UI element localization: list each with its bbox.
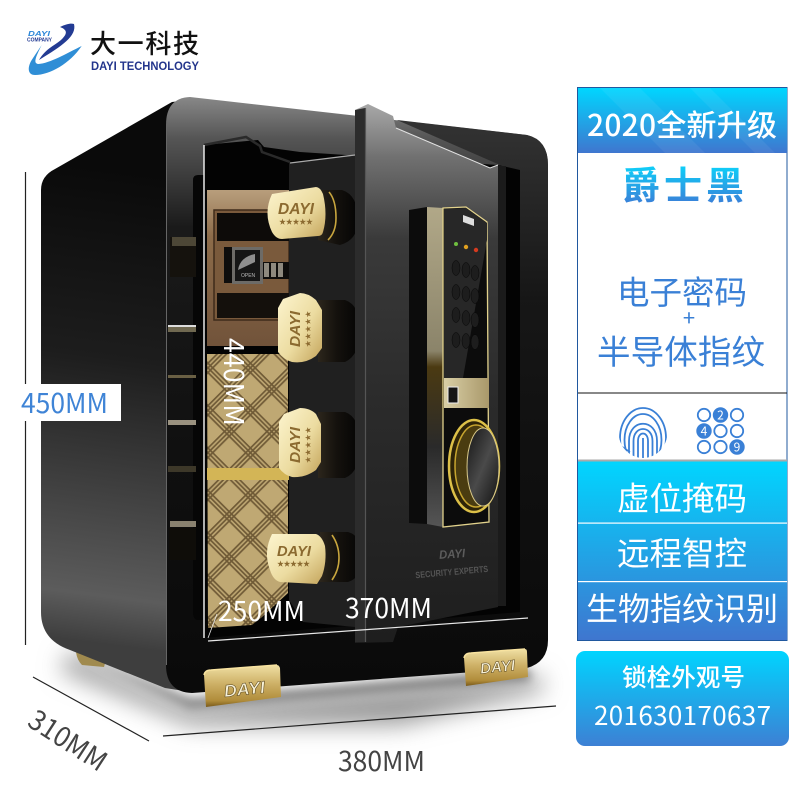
front foot left	[204, 665, 281, 707]
interior lower slot	[217, 293, 289, 318]
patent number: 201630170637	[594, 696, 771, 733]
front foot left: DAYI	[223, 678, 267, 701]
feature two: 远程智控	[617, 528, 747, 575]
floor shadow	[60, 652, 545, 725]
interior dimension lines	[204, 145, 528, 641]
lock type line two: 半导体指纹	[597, 325, 765, 374]
inner door top highlight	[290, 155, 355, 163]
locking bolt 1: DAYI	[278, 201, 315, 218]
door brand: SECURITY EXPERTS	[415, 564, 489, 580]
interior brown back panel	[207, 190, 289, 346]
patent title: 锁栓外观号	[622, 659, 745, 694]
hinge thin two	[168, 375, 196, 378]
locking bolt 2: DAYI	[287, 310, 304, 347]
door brand: DAYI	[439, 546, 466, 562]
lock type line one: 电子密码	[617, 267, 747, 314]
lock glass reflection	[444, 208, 487, 378]
front foot right	[464, 649, 528, 686]
combination lock window	[224, 247, 289, 284]
logo small company text: COMPANY	[27, 38, 52, 44]
lock glass panel	[443, 207, 489, 527]
logo english name: DAYI TECHNOLOGY	[91, 59, 199, 73]
depth label 310MM: 310MM	[22, 698, 116, 779]
hinge thin three	[168, 420, 196, 425]
front foot right: DAYI	[479, 657, 517, 678]
locking bolt 2	[278, 293, 360, 362]
locking bolt 3: DAYI	[287, 426, 304, 463]
dial inner ring	[455, 425, 497, 507]
fingerprint sensor	[448, 387, 458, 403]
door edge strip	[355, 108, 365, 642]
locking bolt 2: ★★★★★	[305, 310, 312, 347]
interior drawer frame	[214, 210, 289, 320]
locking bolt 4: DAYI	[277, 543, 312, 560]
safe	[41, 97, 548, 707]
height label 450MM: 450MM	[21, 381, 108, 421]
lock housing	[409, 207, 427, 524]
hinge thin one	[168, 325, 196, 332]
fingerprint gold strip	[444, 378, 489, 408]
interior top notch highlight	[204, 137, 290, 162]
locking bolt 3	[279, 408, 360, 478]
locking bolt 3: ★★★★★	[305, 426, 312, 463]
frame top right darker area	[397, 120, 548, 300]
logo small text: DAYI	[28, 31, 51, 38]
locking bolt 1: ★★★★★	[279, 218, 313, 226]
door right edge	[498, 166, 506, 606]
logo chinese name: 大一科技	[90, 24, 199, 61]
icon: number pad: 4	[701, 422, 708, 440]
interior gold patterned wall	[207, 354, 288, 628]
hinge block bottom	[169, 528, 196, 560]
panel header	[578, 88, 787, 153]
panel background	[578, 88, 787, 640]
logo: Dayi Technology	[27, 24, 199, 75]
logo swoosh light blue	[29, 45, 82, 75]
interior gold band	[207, 468, 289, 480]
keypad buttons	[452, 260, 479, 350]
plus sign: +	[683, 301, 695, 333]
door brand	[415, 546, 489, 580]
feature block	[578, 460, 787, 640]
colour name: 爵士黑	[622, 155, 744, 210]
status leds	[454, 242, 478, 252]
locking bolt 1	[268, 187, 358, 245]
combination lock window: OPEN	[241, 273, 256, 279]
icon: number pad: 2	[717, 406, 724, 424]
interior opening	[204, 140, 520, 638]
patent badge	[576, 651, 789, 746]
lock logo plate	[463, 215, 474, 226]
hinge bolts holes	[168, 237, 196, 560]
feature three: 生物指纹识别	[586, 584, 778, 630]
electronic lock	[409, 207, 499, 527]
spec panel	[578, 88, 787, 640]
icon: number pad	[697, 406, 744, 456]
interior upper slot	[217, 213, 289, 241]
label 250MM: 250MM	[218, 589, 305, 629]
icon: number pad: 9	[734, 438, 740, 456]
label 370MM: 370MM	[345, 586, 432, 626]
door top highlight	[396, 128, 498, 168]
locking bolt 4	[267, 532, 362, 584]
frame left highlight edge	[166, 125, 168, 665]
label 440MM: 440MM	[216, 338, 256, 426]
rear foot	[76, 652, 106, 667]
inner door panel	[289, 155, 355, 627]
dial knob	[467, 428, 499, 506]
height dimension line	[24, 172, 26, 645]
safe door	[355, 104, 498, 643]
hinge block top highlight	[172, 237, 196, 246]
safe side panel	[41, 100, 190, 692]
locking bolt 4: ★★★★★	[277, 560, 310, 568]
panel header: 2020全新升级	[587, 101, 777, 145]
dial collar	[449, 420, 499, 512]
divider	[578, 392, 787, 394]
safe front frame	[166, 97, 548, 693]
hinge block bottom highlight	[170, 521, 196, 527]
lower frame recess	[193, 175, 204, 620]
hinge thin four	[168, 466, 196, 472]
depth dimension line	[33, 677, 149, 741]
width dimension line	[163, 706, 556, 736]
icon: fingerprint	[619, 407, 667, 458]
width label 380MM: 380MM	[338, 739, 425, 779]
logo swoosh navy	[39, 24, 74, 60]
door bevel highlight	[364, 108, 366, 642]
hinge block top	[170, 237, 196, 277]
lock gold side	[427, 207, 443, 527]
feature one: 虚位掩码	[617, 473, 747, 520]
